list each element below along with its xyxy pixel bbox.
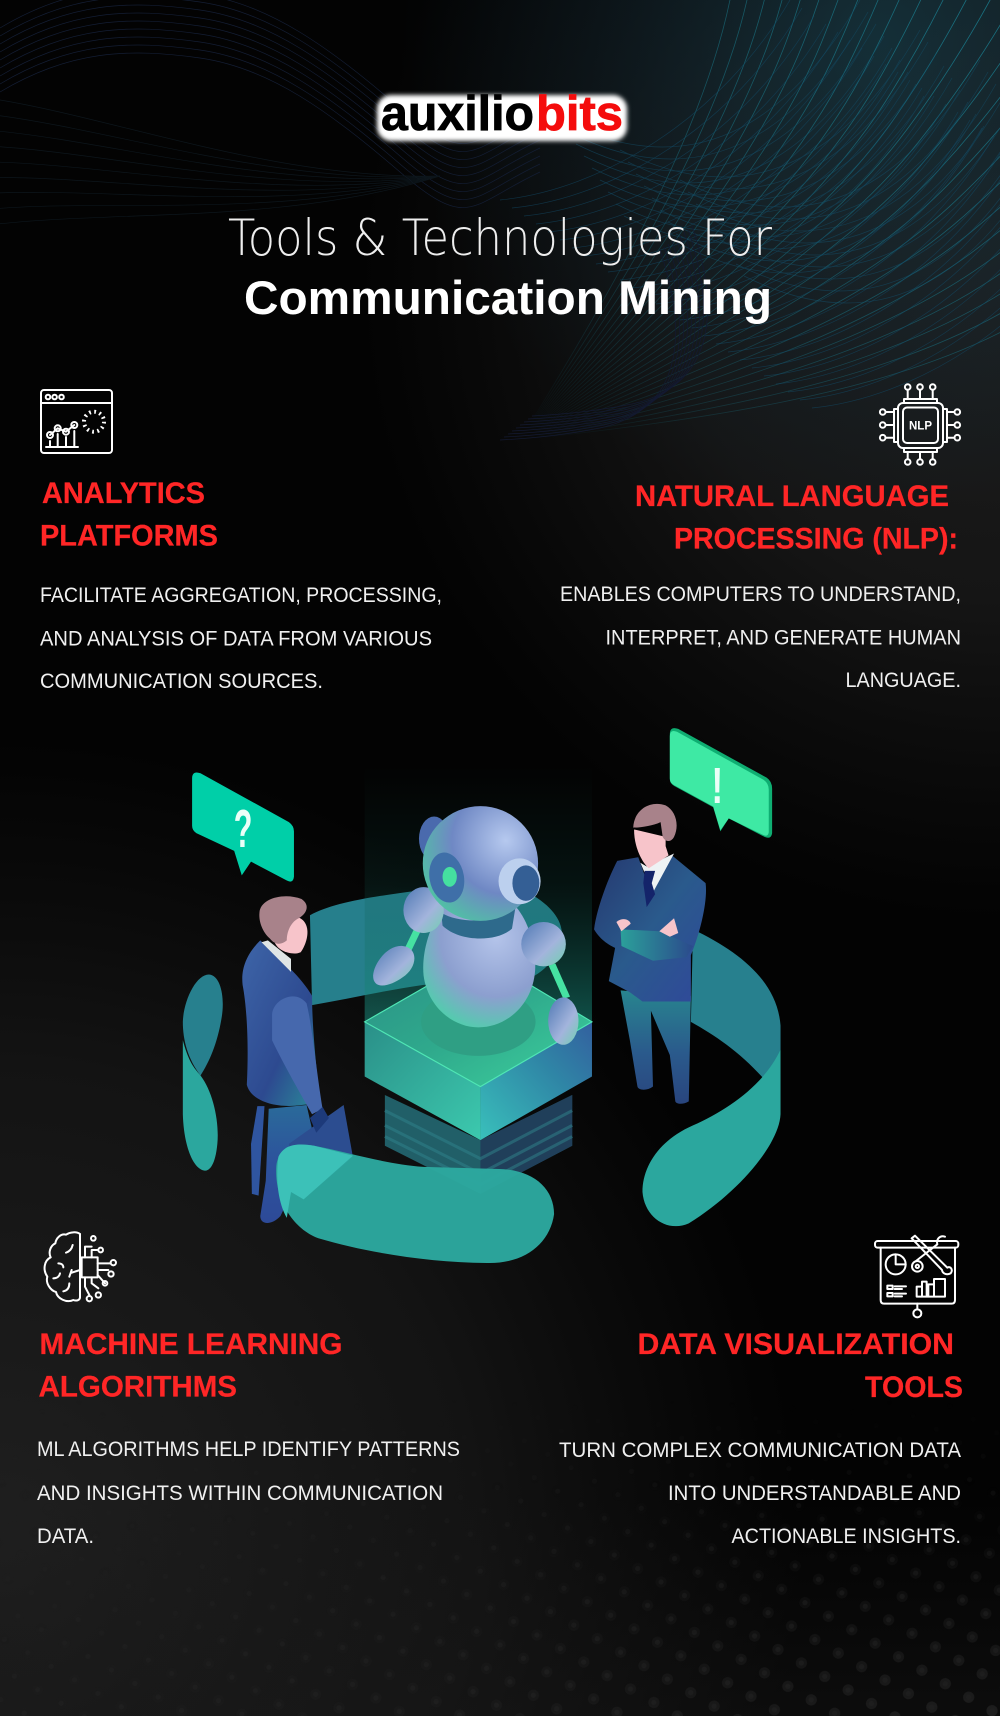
heading: TOOLS xyxy=(865,1371,963,1404)
platform top xyxy=(365,955,592,1087)
hair xyxy=(259,896,307,944)
text block: AND INSIGHTS WITHIN COMMUNICATION xyxy=(37,1482,443,1505)
illustration: robot and two businessmen xyxy=(183,728,781,1263)
collar xyxy=(441,908,515,939)
head xyxy=(423,806,538,921)
icon: NLP chip xyxy=(880,384,960,465)
panel: data visualization tools xyxy=(559,1236,963,1548)
hand left xyxy=(373,946,414,986)
platform right face xyxy=(480,1022,592,1140)
heading xyxy=(40,477,218,552)
ribbon: front band xyxy=(276,1145,554,1263)
text block: INTO UNDERSTANDABLE AND xyxy=(668,1482,961,1505)
heading xyxy=(38,1328,342,1404)
heading: ANALYTICS xyxy=(42,477,205,510)
hair xyxy=(633,804,677,841)
speech bubble: question xyxy=(192,772,294,882)
platform left face xyxy=(365,1022,480,1140)
speech bubble: exclamation: ! xyxy=(712,757,723,815)
text block: COMMUNICATION SOURCES. xyxy=(40,670,323,693)
ribbon: back band xyxy=(310,890,562,1005)
text block: AND ANALYSIS OF DATA FROM VARIOUS xyxy=(40,628,432,650)
text block: FACILITATE AGGREGATION, PROCESSING, xyxy=(40,584,442,607)
icon: NLP chip: NLP xyxy=(909,420,932,432)
shoulder right xyxy=(521,922,566,966)
pupil xyxy=(443,867,457,887)
heading: PROCESSING (NLP): xyxy=(674,523,958,556)
text block xyxy=(40,584,442,693)
thin back leg xyxy=(251,1106,264,1196)
body xyxy=(423,907,535,1027)
ribbon: right light xyxy=(642,1050,781,1226)
right ear xyxy=(499,858,541,904)
speech bubble: question: ? xyxy=(234,801,252,860)
text block: LANGUAGE. xyxy=(846,669,961,692)
text block xyxy=(560,583,961,692)
face xyxy=(274,916,307,954)
icon: presentation board with tools xyxy=(875,1236,958,1317)
legs xyxy=(621,990,691,1104)
stacked layers under platform xyxy=(385,1095,572,1194)
heading: NATURAL LANGUAGE xyxy=(635,480,949,513)
left eye xyxy=(426,851,468,905)
right man xyxy=(594,804,706,1104)
panel: analytics platforms xyxy=(40,390,442,693)
text block xyxy=(559,1439,961,1548)
text block: ML ALGORITHMS HELP IDENTIFY PATTERNS xyxy=(37,1438,460,1461)
arm left xyxy=(407,929,418,952)
ribbon: left light xyxy=(183,1040,218,1171)
text block: TURN COMPLEX COMMUNICATION DATA xyxy=(559,1439,961,1462)
suit xyxy=(242,940,320,1106)
text block xyxy=(37,1438,460,1548)
heading: ALGORITHMS xyxy=(38,1371,237,1404)
heading: PLATFORMS xyxy=(40,520,218,552)
heading: DATA VISUALIZATION xyxy=(638,1328,954,1361)
shoulder left xyxy=(403,887,444,933)
panel: natural language processing xyxy=(560,384,961,692)
face xyxy=(634,829,669,868)
logo: bits xyxy=(536,87,623,141)
panel: machine learning algorithms xyxy=(37,1232,460,1548)
briefcase xyxy=(289,1105,353,1199)
hand left xyxy=(616,919,631,931)
shirt and tie xyxy=(640,854,674,892)
text block: DATA. xyxy=(37,1525,94,1548)
arm right xyxy=(552,964,567,998)
ear inner xyxy=(512,865,539,901)
background dots xyxy=(314,1494,1000,1716)
heading xyxy=(638,1328,963,1404)
logo xyxy=(377,87,627,141)
text block: ENABLES COMPUTERS TO UNDERSTAND, xyxy=(560,583,961,606)
background wave lines xyxy=(0,0,1000,440)
icon: brain with circuit xyxy=(45,1232,116,1301)
suit xyxy=(594,855,706,1001)
hologram beam xyxy=(365,767,592,1026)
logo: auxilio xyxy=(381,87,534,141)
icon: analytics dashboard xyxy=(41,390,112,453)
text block: ACTIONABLE INSIGHTS. xyxy=(732,1525,961,1548)
collar xyxy=(262,940,291,972)
hand xyxy=(310,1107,329,1133)
text block: INTERPRET, AND GENERATE HUMAN xyxy=(606,626,961,650)
arm xyxy=(272,996,323,1114)
title: Communication Mining xyxy=(244,271,772,324)
ribbon: right dark xyxy=(691,929,781,1077)
left man xyxy=(242,896,353,1223)
hand right xyxy=(548,997,578,1045)
robot shadow xyxy=(421,988,536,1056)
title xyxy=(228,209,772,324)
front leg xyxy=(260,1105,312,1223)
ribbon overlap over briefcase xyxy=(277,1145,353,1218)
tie xyxy=(643,871,655,907)
speech bubble: exclamation xyxy=(670,728,772,838)
head bump xyxy=(419,817,449,861)
robot xyxy=(373,806,578,1045)
ribbon: left dark xyxy=(183,974,223,1075)
heading: MACHINE LEARNING xyxy=(40,1328,342,1361)
crossed arm xyxy=(621,929,693,961)
heading xyxy=(635,480,958,556)
title: Tools & Technologies For xyxy=(228,209,772,267)
hand xyxy=(659,918,678,937)
